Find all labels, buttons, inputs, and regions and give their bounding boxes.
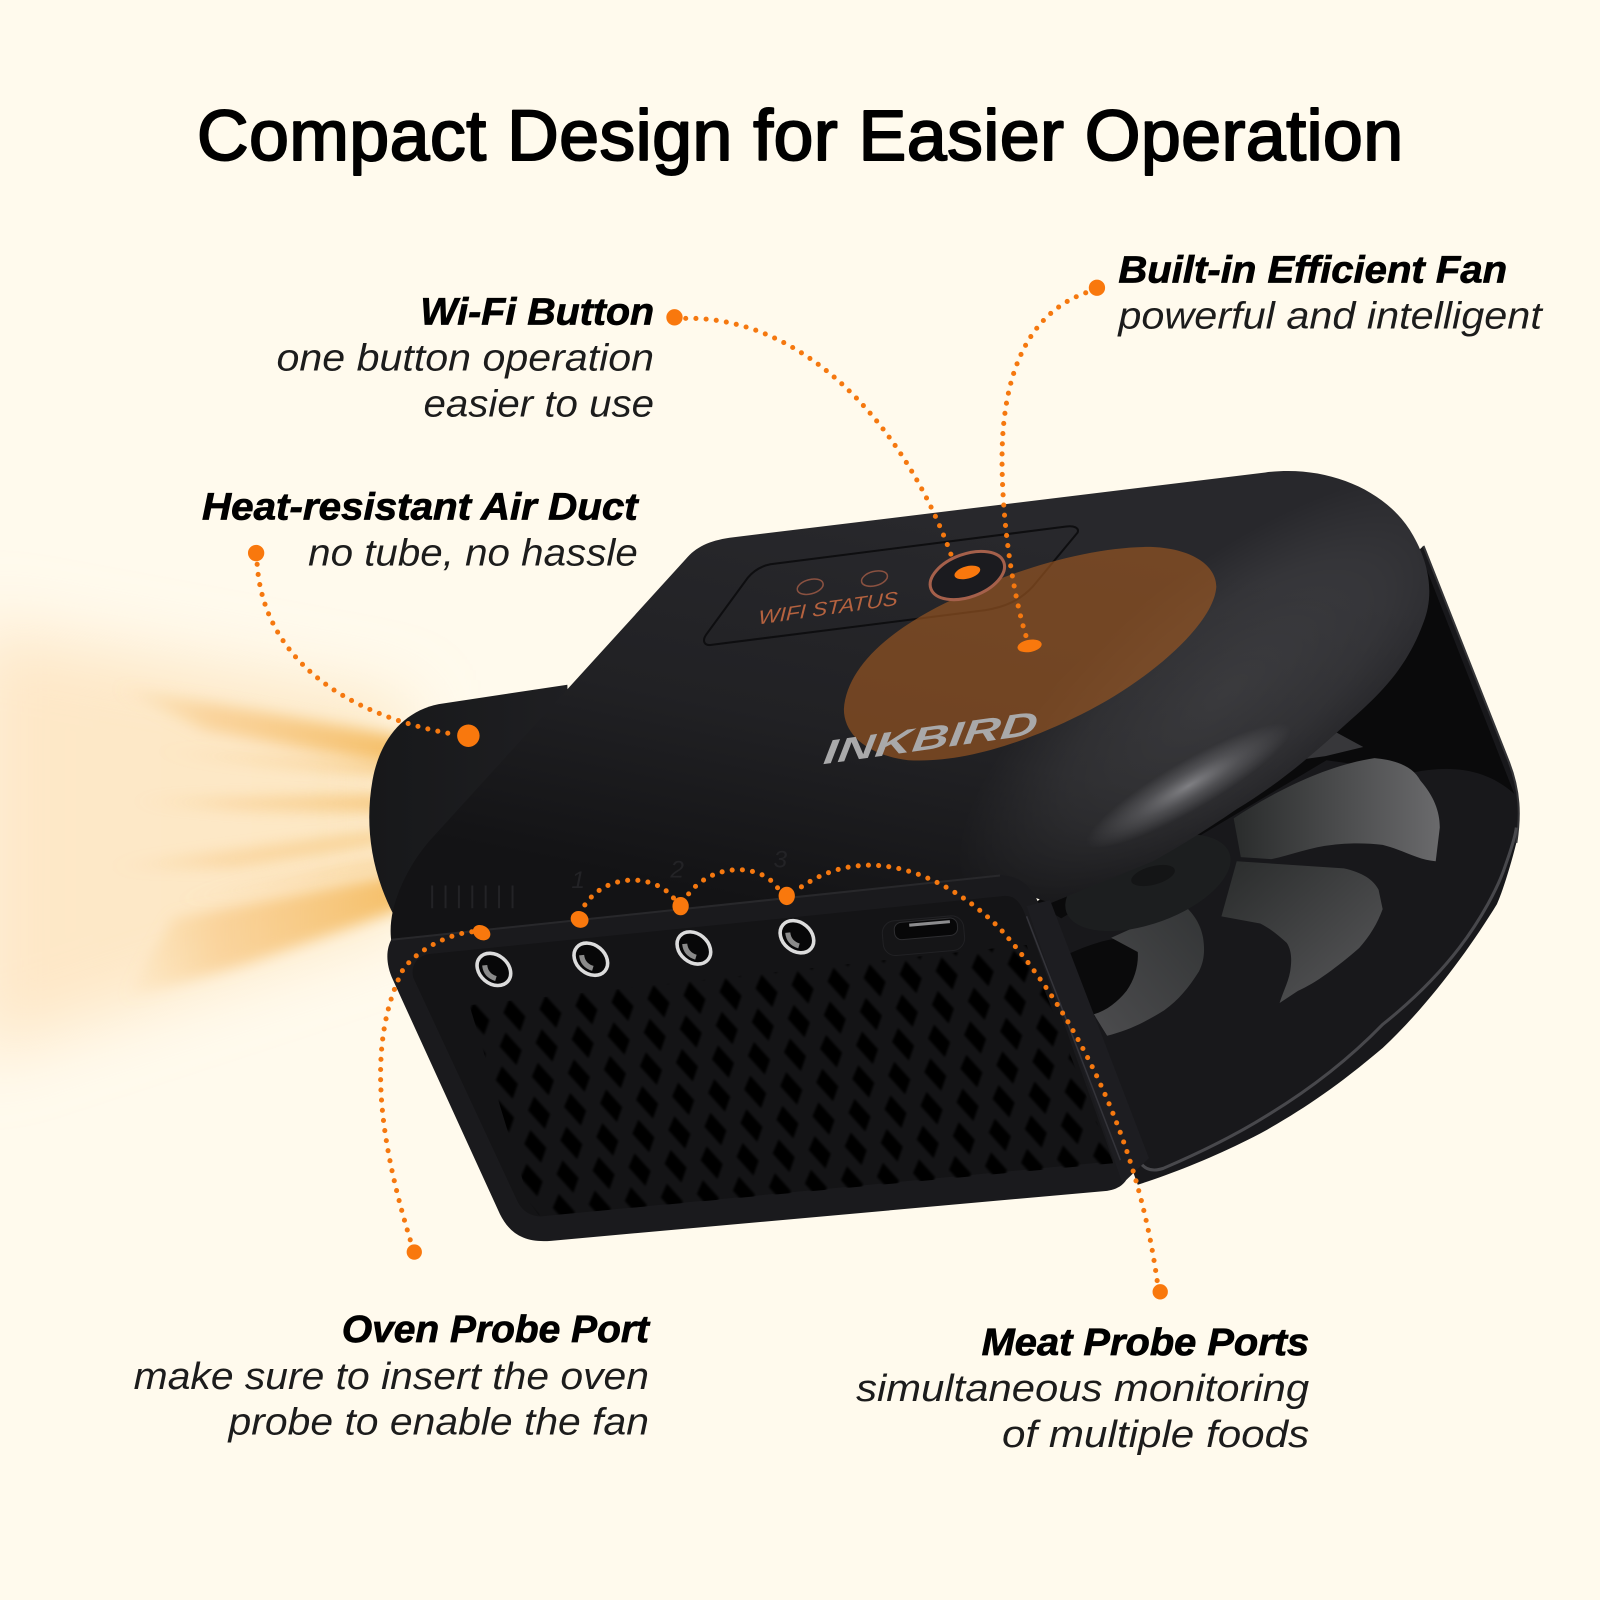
callout: Wi-Fi Button <box>277 290 654 424</box>
WIFI STATUS label: WIFI STATUS <box>758 588 898 630</box>
callout: Meat Probe Ports <box>856 1321 1309 1455</box>
faint port numbers: ||||||| <box>429 882 515 909</box>
title: Compact Design for Easier Operation <box>197 96 1403 176</box>
callout: Meat Probe Ports: of multiple foods <box>1002 1413 1309 1455</box>
rear air duct <box>369 685 571 913</box>
callout: Built-in Efficient Fan: powerful and intelligent <box>1117 295 1543 337</box>
callout: Heat-resistant Air Duct: no tube, no hassle <box>308 531 638 573</box>
callout: Meat Probe Ports: simultaneous monitoring <box>856 1367 1309 1409</box>
leader: Meat Probe Ports <box>568 865 1168 1299</box>
callout: Built-in Efficient Fan: Built-in Efficient Fan <box>1118 249 1507 291</box>
top body shell <box>391 471 1429 969</box>
callout: Meat Probe Ports: Meat Probe Ports <box>982 1321 1309 1363</box>
faint port numbers: 3 <box>773 846 787 873</box>
probe ports <box>471 914 820 992</box>
air flow rays <box>0 622 408 1061</box>
fan hub <box>1052 815 1243 951</box>
callout: Wi-Fi Button: easier to use <box>423 382 654 424</box>
product illustration <box>369 471 1519 1241</box>
callout: Heat-resistant Air Duct <box>202 485 639 573</box>
callout: Oven Probe Port: probe to enable the fan <box>227 1401 649 1443</box>
callout: Built-in Efficient Fan <box>1117 249 1543 337</box>
INKBIRD logo: INKBIRD <box>822 705 1040 772</box>
control panel <box>704 526 1078 645</box>
callout: Wi-Fi Button: one button operation <box>277 336 654 378</box>
leader: Oven Probe Port <box>381 922 493 1260</box>
vent mesh <box>470 945 1113 1214</box>
USB port <box>881 915 966 957</box>
faint port numbers: 2 <box>669 857 684 884</box>
fan position highlight <box>844 547 1216 761</box>
callout: Heat-resistant Air Duct: Heat-resistant Air Duct <box>202 485 639 527</box>
faint port numbers <box>429 846 787 909</box>
Wi-Fi button <box>924 542 1011 609</box>
leader: Heat-resistant Air Duct <box>248 545 480 747</box>
callout: Oven Probe Port <box>134 1308 650 1443</box>
fan blades <box>1094 733 1440 1036</box>
callout: Oven Probe Port: make sure to insert the oven <box>134 1355 649 1397</box>
status LEDs <box>796 568 889 597</box>
probe panel <box>387 875 1149 1241</box>
leader: Built-in Efficient Fan <box>1002 280 1105 654</box>
fan housing <box>1036 546 1519 1185</box>
callout: Oven Probe Port: Oven Probe Port <box>342 1308 650 1350</box>
faint port numbers: 1 <box>571 867 585 894</box>
leader: Wi-Fi Button <box>666 309 982 582</box>
callout: Wi-Fi Button: Wi-Fi Button <box>420 290 654 332</box>
